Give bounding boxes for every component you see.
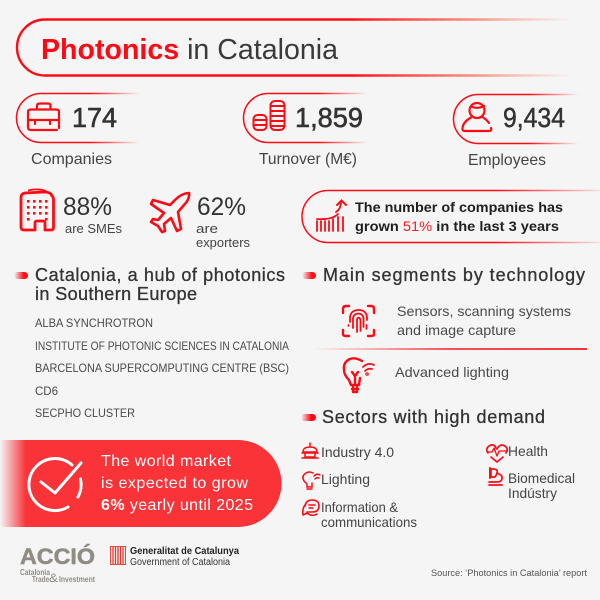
segment text	[397, 303, 571, 338]
segment text: and image capture	[397, 322, 516, 338]
label: communications	[321, 514, 417, 530]
logo: ACCIÓ: Trade	[32, 575, 49, 584]
title banner	[17, 20, 572, 76]
label: Information &	[321, 499, 399, 515]
heading	[35, 265, 285, 304]
segment text: Sensors, scanning systems	[397, 303, 571, 319]
logo: ACCIÓ: &	[49, 571, 58, 585]
logo: Generalitat de Catalunya	[110, 546, 239, 568]
label: Health	[508, 443, 548, 459]
icon: briefcase	[28, 104, 59, 130]
logo: ACCIÓ: ACCIÓ	[20, 544, 95, 569]
label: Companies	[31, 151, 112, 168]
callout: world market	[0, 440, 282, 527]
market text: The world market	[101, 453, 232, 470]
panel: Catalonia hub	[14, 265, 289, 420]
label: are SMEs	[65, 221, 122, 236]
stat: exporters	[151, 193, 250, 250]
title: Photonics in Catalonia	[41, 34, 339, 66]
logo: Generalitat de Catalunya: Government of Catalonia	[130, 557, 230, 568]
logo: ACCIÓ: Catalonia	[20, 568, 50, 577]
sector: industry	[302, 443, 394, 460]
value: 9,434	[503, 102, 565, 133]
list of institutions: INSTITUTE OF PHOTONIC SCIENCES IN CATALONIA	[35, 339, 289, 353]
label: exporters	[196, 235, 250, 250]
market text: 6% yearly until 2025	[101, 497, 253, 514]
label: Indústry	[508, 485, 557, 501]
value: 88%	[63, 193, 112, 221]
icon: heart with pulse	[487, 445, 507, 462]
icon: check mark in circle	[29, 459, 81, 511]
sector: health	[487, 443, 548, 462]
icon: microscope	[489, 468, 502, 485]
icon: person	[462, 103, 491, 131]
stat: employees	[454, 94, 579, 169]
source note: Source: ‘Photonics in Catalonia’ report	[431, 568, 587, 579]
icon: industrial robot	[302, 443, 318, 458]
heading: Main segments by technology	[323, 265, 585, 285]
icon: smart bulb	[344, 358, 374, 392]
value: 174	[72, 102, 117, 133]
bullet	[302, 272, 316, 279]
label: Turnover (M€)	[259, 151, 357, 168]
list of institutions: SECPHO CLUSTER	[35, 406, 135, 420]
growth text: The number of companies has	[355, 199, 563, 215]
market text	[101, 453, 253, 514]
icon: office building	[21, 189, 54, 230]
stat: companies	[16, 94, 140, 168]
sector: biomedical	[489, 468, 575, 501]
stat: turnover	[243, 94, 368, 168]
heading: Sectors with high demand	[322, 407, 545, 427]
heading: Catalonia, a hub of photonics	[35, 265, 285, 285]
emblem: shield	[110, 546, 126, 564]
icon: coin stacks	[254, 101, 284, 130]
label: Industry 4.0	[321, 444, 394, 460]
logo: ACCIÓ	[20, 544, 95, 585]
list of institutions: CD6	[35, 384, 58, 398]
icon: speech bubbles	[303, 500, 319, 515]
bullet	[301, 414, 316, 421]
panel: main segments	[302, 265, 587, 392]
market text: is expected to grow	[101, 475, 248, 492]
label: are	[196, 221, 218, 236]
list of institutions: BARCELONA SUPERCOMPUTING CENTRE (BSC)	[35, 361, 289, 375]
icon: bulb	[303, 472, 320, 489]
sector: information	[303, 499, 417, 530]
callout: company growth	[302, 190, 600, 242]
heading: in Southern Europe	[35, 284, 197, 304]
bullet	[14, 272, 28, 279]
value: 62%	[197, 193, 246, 221]
stat: SMEs	[21, 189, 122, 236]
icon: fingerprint scan	[343, 306, 374, 336]
growth text	[355, 199, 563, 234]
label: Lighting	[321, 471, 370, 487]
logo: ACCIÓ: Investment	[59, 575, 95, 584]
value: 1,859	[295, 102, 363, 133]
icon: airplane	[151, 193, 189, 232]
growth text: grown 51% in the last 3 years	[355, 218, 559, 234]
wordmark: Generalitat de Catalunya	[130, 546, 239, 557]
label: Employees	[468, 152, 546, 169]
sector: lighting	[303, 471, 370, 489]
list of institutions	[35, 316, 289, 420]
label: Biomedical	[508, 470, 575, 486]
segment text: Advanced lighting	[395, 364, 509, 380]
list of institutions: ALBA SYNCHROTRON	[35, 316, 153, 330]
icon: rising bar chart	[317, 200, 346, 231]
panel: sectors	[301, 407, 575, 530]
